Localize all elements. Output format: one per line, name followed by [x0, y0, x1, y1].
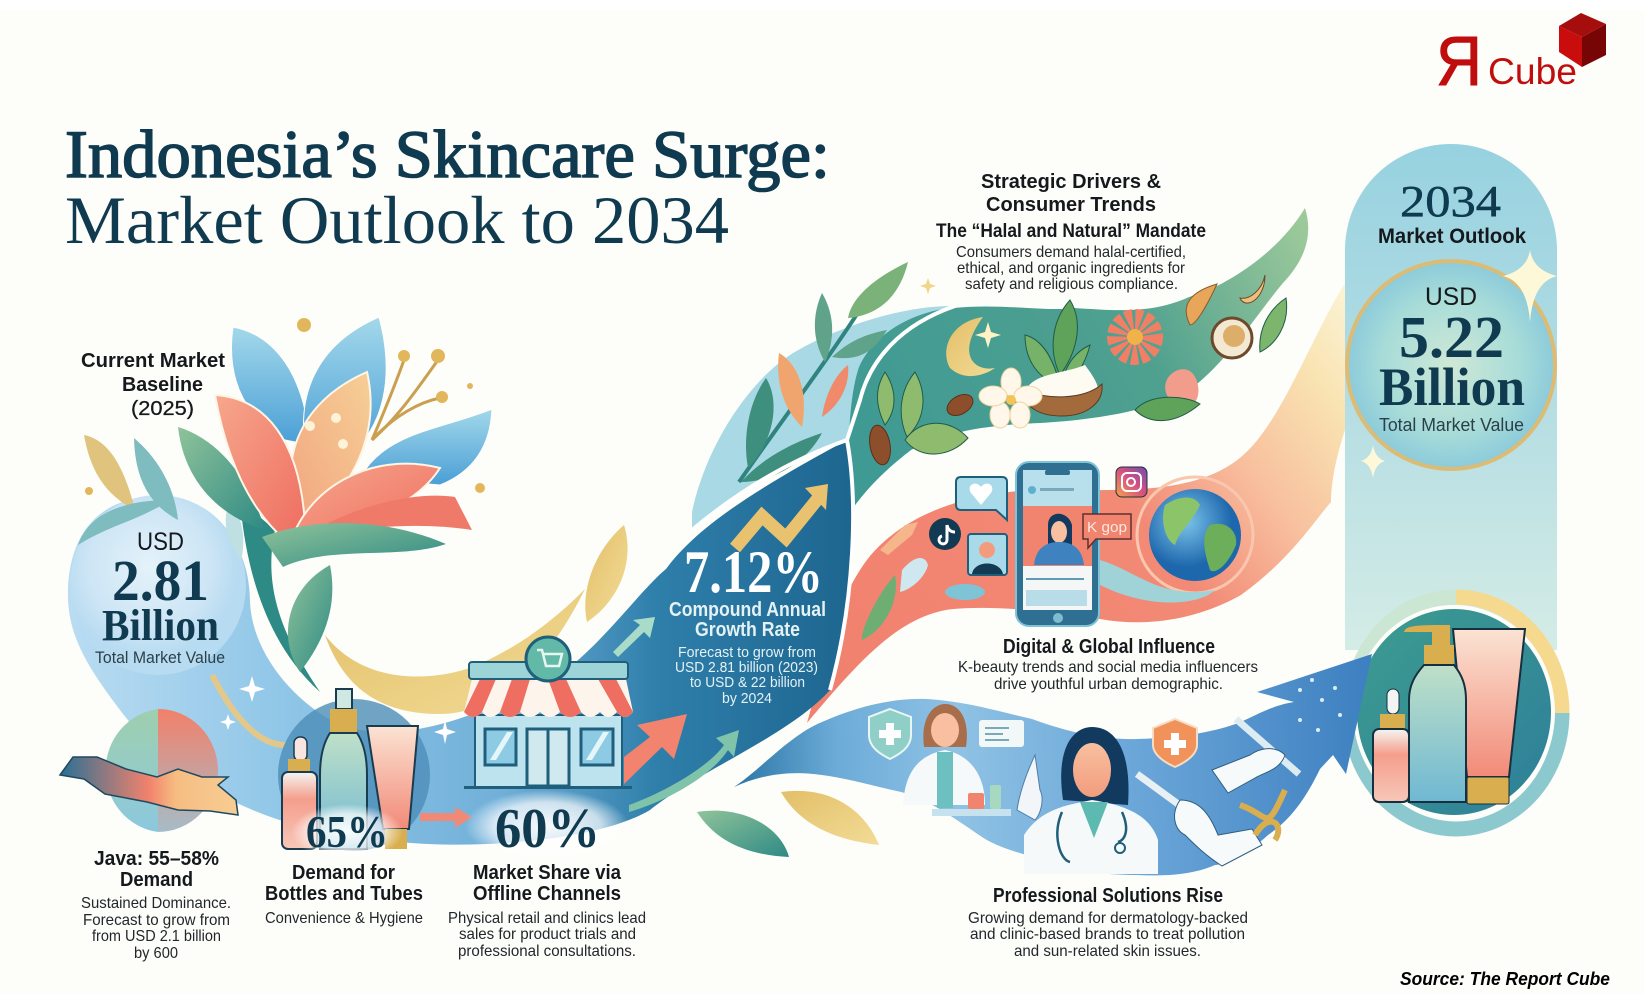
main blue swoosh [68, 440, 853, 845]
building [475, 715, 622, 787]
white separator curve [692, 440, 853, 690]
text: professional solutions: and sun-related skin issues. [1014, 943, 1201, 960]
branch with leaves over light wave [739, 262, 908, 482]
green ribbon: halal and natural [848, 208, 1308, 515]
CAGR text block: Compound Annual [669, 599, 826, 621]
text: offline channels: Physical retail and clinics lead [448, 910, 646, 927]
source note: Source: The Report Cube [1400, 969, 1610, 989]
screen [1023, 470, 1092, 610]
window glare [490, 732, 609, 760]
logo: RCube: Cube [1488, 51, 1577, 92]
stat: 65%: 65% [306, 806, 388, 857]
Java market chart [60, 709, 238, 832]
text: digital and global influence: drive youthful urban demographic. [994, 676, 1223, 693]
text: digital and global influence [958, 636, 1258, 693]
petal: blue lower right [360, 409, 492, 485]
icon: cosmetic pad [900, 558, 928, 592]
icon: orange shield [1153, 719, 1197, 767]
petal: coral left [215, 395, 305, 540]
pump bottle [1404, 625, 1466, 802]
teal wave on coral [1100, 560, 1215, 602]
text: offline channels: sales for product trials and [459, 926, 636, 943]
text: strategic drivers: Strategic Drivers & [981, 171, 1161, 193]
chat card [979, 720, 1024, 747]
text: current market baseline [81, 350, 225, 420]
icon: green leaf [1135, 397, 1200, 421]
icon: golden leaves [1186, 275, 1287, 352]
petal: coral low [290, 496, 472, 545]
icon: cocoa beans [867, 390, 977, 466]
text: digital and global influence: Digital & Global Influence [1003, 636, 1215, 658]
tube [1453, 629, 1525, 804]
text: strategic drivers [936, 171, 1206, 293]
icon: coconut [1212, 318, 1252, 358]
icon: K-pop bubble: K gop [1087, 519, 1127, 536]
text: offline channels: Offline Channels [473, 883, 621, 905]
icon: pink blossom [1165, 369, 1198, 408]
icon: plant leaves [1025, 300, 1090, 385]
icon: roller [945, 584, 985, 600]
text: strategic drivers: The “Halal and Natural” Mandate [936, 221, 1206, 242]
right pillar: 2034 market outlook [1345, 144, 1557, 650]
icon: coral daisy [1117, 319, 1153, 355]
icon: TikTok badge [929, 518, 961, 550]
CAGR text block: Growth Rate [695, 619, 800, 641]
figure: clinician left [903, 704, 1011, 816]
text: professional solutions: and clinic-based brands to treat pollution [970, 926, 1245, 943]
influencer figure [1034, 514, 1084, 565]
icon: crescent moon [946, 317, 995, 376]
baseline value disc: Billion [102, 601, 219, 650]
text: bottles and tubes: Convenience & Hygiene [265, 910, 423, 927]
CAGR text block [669, 539, 826, 707]
logo: RCube: Я [1436, 22, 1482, 100]
text: current market baseline: (2025) [131, 398, 194, 420]
stem [240, 500, 320, 692]
outlook value disc: Total Market Value [1379, 415, 1524, 435]
storefront illustration [464, 637, 633, 789]
text: current market baseline: Current Market [81, 350, 225, 372]
sparkles [1361, 250, 1557, 478]
pie chart [106, 709, 218, 832]
petal: green left [178, 427, 265, 530]
windows and door [485, 729, 613, 786]
gloved hand with tool [1212, 719, 1299, 793]
petal: peach [291, 372, 371, 525]
icon: green shield [869, 709, 911, 759]
icon: sparkle star [975, 322, 1001, 348]
doctor ribbon with arrow [734, 654, 1372, 875]
small side leaves [78, 435, 243, 560]
icon: heart bubble [956, 477, 1007, 520]
CAGR text block: USD 2.81 billion (2023) [675, 659, 818, 676]
text: Java demand [81, 848, 231, 962]
lower leaf [288, 565, 332, 672]
text: digital and global influence: K-beauty trends and social media influencers [958, 659, 1258, 676]
icon: cart badge [526, 637, 570, 681]
arrow: gold zigzag [735, 484, 828, 548]
gold crescent swoosh [325, 589, 585, 714]
text: offline channels [448, 862, 646, 960]
flower illustration [78, 317, 492, 692]
text: Java demand: from USD 2.1 billion [92, 928, 221, 945]
gold accent stroke [212, 675, 285, 745]
text: strategic drivers: Consumer Trends [986, 194, 1156, 216]
small coral arrow [420, 807, 472, 828]
icon: profile card [968, 534, 1007, 575]
text: professional solutions [968, 885, 1248, 960]
figure: doctor centre [1024, 727, 1158, 874]
gold leaf lower [781, 791, 879, 845]
arrow: pale green small [613, 617, 655, 657]
text: Java demand: Forecast to grow from [83, 912, 230, 929]
icon: plumeria flower [979, 368, 1042, 428]
leaf: green right [262, 523, 446, 567]
title: Indonesia’s Skincare Surge: [65, 116, 830, 192]
outlook heading: Market Outlook [1378, 225, 1526, 248]
logo: RCube [1436, 13, 1606, 100]
petal: blue right [304, 317, 386, 455]
gold flourish [1240, 790, 1285, 840]
digital icons on coral ribbon [862, 477, 1007, 640]
outlook heading [1378, 177, 1526, 248]
text: Java demand: Sustained Dominance. [81, 895, 231, 912]
hand with dropper [1017, 755, 1042, 820]
petal: blue left [232, 327, 310, 445]
tube [367, 726, 418, 849]
text: strategic drivers: safety and religious compliance. [965, 276, 1178, 293]
petal: coral centre [290, 464, 440, 545]
stamen tips [85, 318, 485, 495]
gloved hand with brush [1137, 774, 1262, 866]
stamens [372, 360, 440, 440]
dropper bottle [1373, 689, 1409, 802]
text: current market baseline: Baseline [122, 374, 203, 396]
glitter particles [1298, 678, 1342, 732]
sparkle by ribbon [920, 278, 936, 294]
icon: small arrow [880, 522, 918, 555]
CAGR text block: 7.12% [684, 539, 823, 605]
baseline value disc: Total Market Value [95, 648, 225, 667]
CAGR text block: Forecast to grow from [678, 644, 816, 661]
text: professional solutions: Growing demand for dermatology-backed [968, 910, 1248, 927]
icon: herb sprigs [878, 372, 968, 454]
stat: 60% [465, 790, 629, 862]
CAGR text block: by 2024 [722, 690, 772, 707]
gold leaf [585, 525, 628, 622]
text: Java demand: by 600 [134, 945, 178, 962]
white separator along green ribbon [847, 306, 955, 440]
bottles illustration: left [278, 689, 430, 851]
awning [464, 679, 633, 717]
outlook value disc [1347, 261, 1555, 469]
text: bottles and tubes: Demand for [292, 862, 395, 884]
phone illustration [1016, 462, 1099, 626]
text: Java demand: Demand [120, 869, 193, 891]
home button [1053, 613, 1063, 623]
baseline value disc: 2.81 [112, 548, 209, 613]
map: Java [60, 757, 238, 815]
light blue wave behind branch [692, 306, 955, 530]
text: professional solutions: Professional Solutions Rise [993, 885, 1223, 907]
icon: Instagram [1116, 467, 1147, 497]
sparkles on swoosh [220, 676, 456, 744]
text: Java demand: Java: 55–58% [94, 848, 219, 870]
outlook value disc: USD [1425, 283, 1477, 311]
baseline value disc: USD [137, 528, 184, 556]
baseline value disc [70, 495, 246, 675]
icon: K-pop bubble [1083, 514, 1131, 548]
petal stamens [305, 413, 348, 449]
baseline [464, 786, 632, 789]
icon: cream bowl [1024, 365, 1102, 416]
icon: globe [1137, 477, 1253, 593]
icon: green leaves [862, 575, 896, 640]
text: strategic drivers: Consumers demand halal-certified, [956, 244, 1186, 261]
outlook value disc: 5.22 [1399, 304, 1504, 370]
outlook heading: 2034 [1400, 177, 1501, 226]
text: offline channels: professional consultations. [458, 943, 636, 960]
title: Market Outlook to 2034 [65, 182, 729, 258]
product illustration: right circle [1350, 597, 1562, 829]
green leaf lower [697, 811, 789, 857]
outlook value disc: Billion [1379, 357, 1525, 417]
coral ribbon fading to cream [807, 283, 1345, 723]
title [65, 116, 830, 258]
dropper bottle [282, 737, 317, 849]
text: offline channels: Market Share via [473, 862, 622, 884]
pump bottle [320, 689, 367, 849]
text: strategic drivers: ethical, and organic ingredients for [957, 260, 1186, 277]
roof sign [469, 662, 628, 679]
CAGR text block: to USD & 22 billion [690, 674, 805, 691]
text: bottles and tubes: Bottles and Tubes [265, 883, 423, 905]
arrow: green growth [629, 730, 739, 812]
arrow: coral growth [624, 714, 687, 784]
stat: 60%: 60% [495, 798, 600, 860]
text: bottles and tubes [265, 862, 423, 927]
ring segments [1350, 597, 1562, 829]
